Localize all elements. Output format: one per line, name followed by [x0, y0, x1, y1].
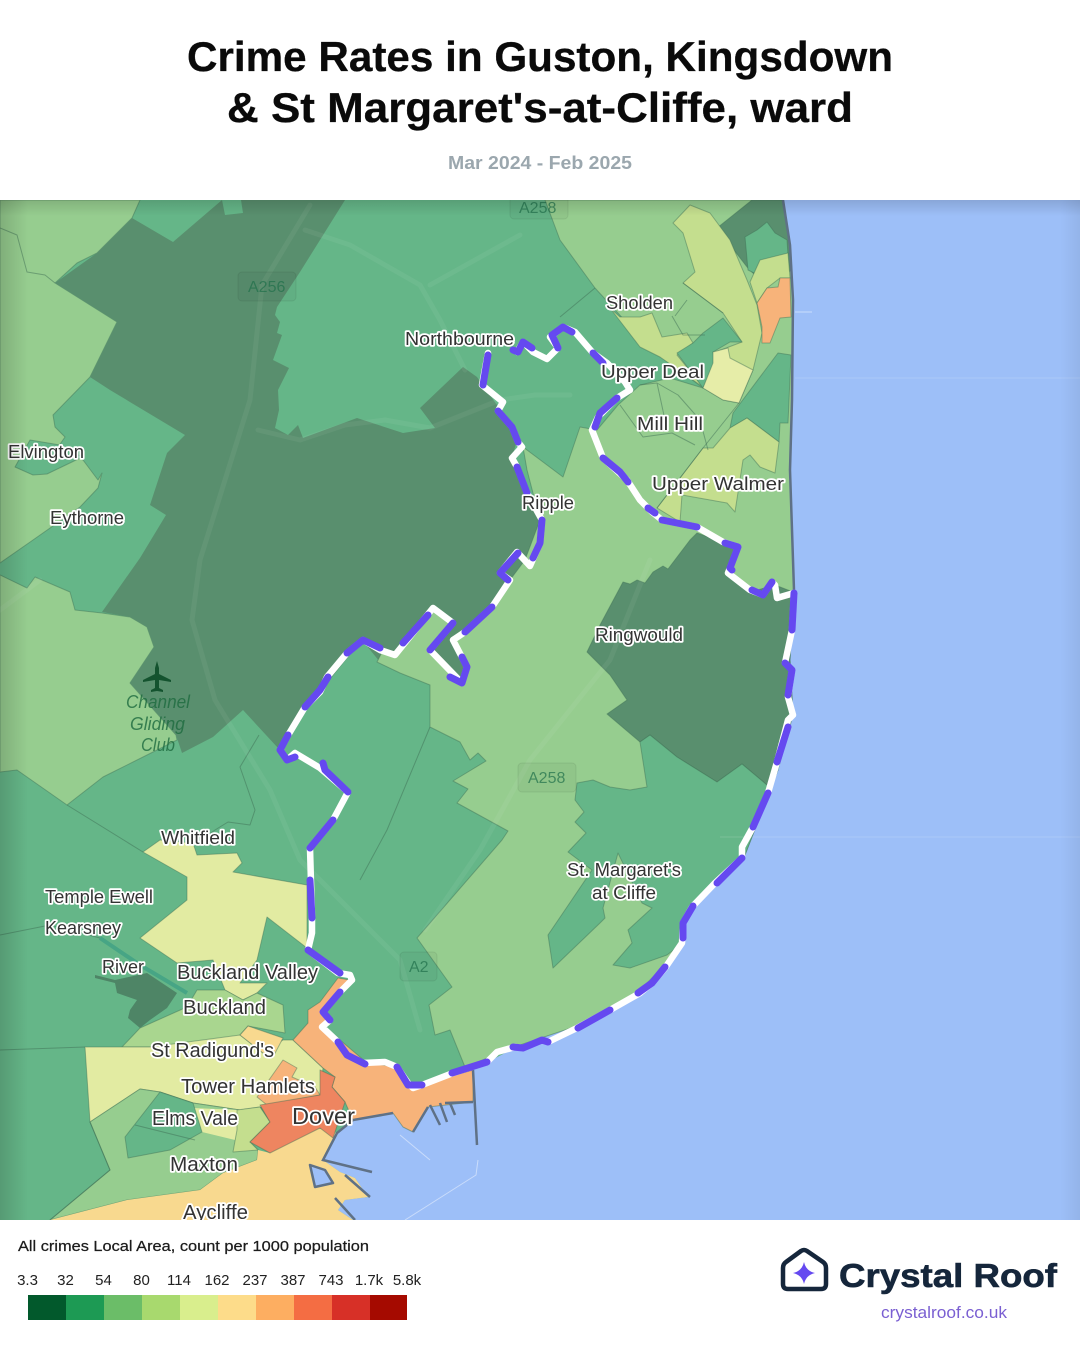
legend values: 80	[133, 1272, 150, 1289]
place labels: Buckland	[183, 997, 266, 1019]
place labels: Ripple	[522, 492, 574, 513]
legend values: 54	[95, 1272, 112, 1289]
place labels: Upper Deal	[601, 361, 704, 382]
place labels: Ringwould	[595, 624, 683, 645]
area: north peach	[240, 1026, 283, 1057]
area: Sholden yellow green	[610, 308, 703, 387]
area: light green north-west	[0, 200, 140, 563]
area: Ringwould dark green	[587, 533, 793, 785]
river	[100, 938, 187, 993]
area: Elms Vale light green	[50, 1089, 270, 1220]
place labels: Whitfield	[161, 827, 235, 848]
title: & St Margaret's-at-Cliffe, ward	[227, 84, 853, 131]
area: Elvington patch	[15, 440, 82, 475]
area: light green Channel Gliding	[0, 575, 177, 805]
area: Deal dark north-east	[720, 200, 790, 274]
area: St Margaret's mid green	[548, 735, 778, 968]
place labels: Tower Hamlets	[181, 1076, 315, 1098]
area: dark green central	[55, 200, 540, 753]
logo	[783, 1250, 1058, 1322]
area: light green east centre	[377, 200, 794, 1067]
road shield A258: A258	[528, 770, 565, 787]
legend values: 387	[280, 1272, 306, 1289]
boundary purple dashes	[280, 327, 794, 1085]
place labels: Temple Ewell	[45, 886, 153, 907]
legend colour scale	[28, 1295, 407, 1320]
land base: mid green areas	[0, 200, 794, 1220]
label: Channel Gliding Club	[126, 692, 191, 755]
area: Dover red	[250, 1070, 345, 1153]
place labels: Sholden	[606, 292, 673, 313]
area: Deal pale yellow patch	[703, 348, 753, 403]
area: Deal mid patch	[745, 222, 788, 275]
place labels: Upper Walmer	[652, 473, 784, 494]
logo wordmark: Crystal Roof	[839, 1257, 1058, 1294]
legend values: 32	[57, 1272, 74, 1289]
legend title: All crimes Local Area, count per 1000 population	[18, 1238, 369, 1255]
road shield A2: A2	[409, 959, 429, 976]
legend values: 1.7k	[355, 1272, 384, 1289]
icon: house outline with star	[783, 1250, 826, 1289]
date subtitle: Mar 2024 - Feb 2025	[448, 153, 632, 173]
area: St Radigund's pale yellow	[85, 1035, 323, 1122]
place labels: St Radigund's	[151, 1040, 274, 1062]
area: Whitfield pale yellow	[140, 840, 307, 1000]
area: River dark patch	[95, 973, 177, 1028]
label: Channel Gliding Club: Gliding	[130, 714, 185, 734]
area: yellow green next to red	[233, 1107, 270, 1152]
place labels	[8, 292, 784, 1224]
legend	[17, 1238, 422, 1320]
road shield A256: A256	[248, 279, 285, 296]
place labels: Buckland Valley	[177, 962, 318, 984]
place labels: Kearsney	[45, 917, 122, 938]
sea	[324, 200, 1080, 1220]
road shield A258 top: A258	[519, 200, 556, 217]
map edge shading	[0, 200, 1080, 1220]
harbour inlet	[310, 1165, 333, 1187]
road shield A258 top	[510, 200, 568, 220]
place labels: River	[102, 956, 144, 977]
place labels: Aycliffe	[183, 1202, 248, 1224]
legend values: 5.8k	[393, 1272, 422, 1289]
area: Deal mid green patch	[677, 318, 742, 388]
label: Channel Gliding Club: Club	[141, 735, 175, 755]
title: Crime Rates in Guston, Kingsdown	[187, 33, 893, 80]
area: Walmer yellow green	[657, 418, 779, 522]
place labels: Northbourne	[405, 328, 514, 349]
road shield A258	[518, 763, 576, 792]
area: small orange block	[257, 1060, 320, 1105]
road shield A256	[238, 272, 296, 301]
legend values	[17, 1272, 422, 1289]
legend values: 114	[167, 1272, 191, 1289]
area: south peach	[50, 1125, 368, 1220]
label: Channel Gliding Club: Channel	[126, 692, 191, 712]
road shield A2	[400, 952, 437, 981]
place labels: Maxton	[170, 1154, 238, 1176]
area: Elms Vale mid green	[125, 1092, 202, 1158]
legend values: 743	[318, 1272, 344, 1289]
roads	[26, 205, 644, 930]
sea markings	[400, 312, 812, 1220]
place labels: Elvington	[8, 441, 84, 462]
area: Deal orange patch	[757, 278, 791, 343]
legend values: 3.3	[17, 1272, 38, 1289]
place labels: Elms Vale	[152, 1108, 238, 1130]
area: Buckland light green	[122, 990, 285, 1053]
boundary white line	[280, 327, 794, 1088]
ward boundary	[280, 327, 794, 1088]
legend values: 162	[204, 1272, 230, 1289]
area: Walmer mid green	[730, 353, 791, 442]
icon: airfield plane	[143, 661, 171, 692]
coast and harbour lines	[323, 200, 794, 1220]
area: Dover orange	[293, 978, 473, 1132]
title	[187, 33, 893, 131]
area: Deal yellow green north	[750, 253, 790, 303]
place labels: Eythorne	[50, 507, 124, 528]
place labels: St. Margaret's	[567, 859, 681, 880]
place labels: Dover	[292, 1103, 355, 1129]
area outlines	[0, 228, 739, 1220]
area: big yellow green Deal	[673, 205, 762, 403]
logo url: crystalroof.co.uk	[881, 1303, 1008, 1322]
choropleth map	[0, 190, 1080, 1224]
area: pale centre near Elms Vale	[193, 1108, 240, 1140]
place labels: at Cliffe	[592, 882, 656, 903]
place labels: Mill Hill	[637, 413, 703, 434]
legend values: 237	[242, 1272, 268, 1289]
